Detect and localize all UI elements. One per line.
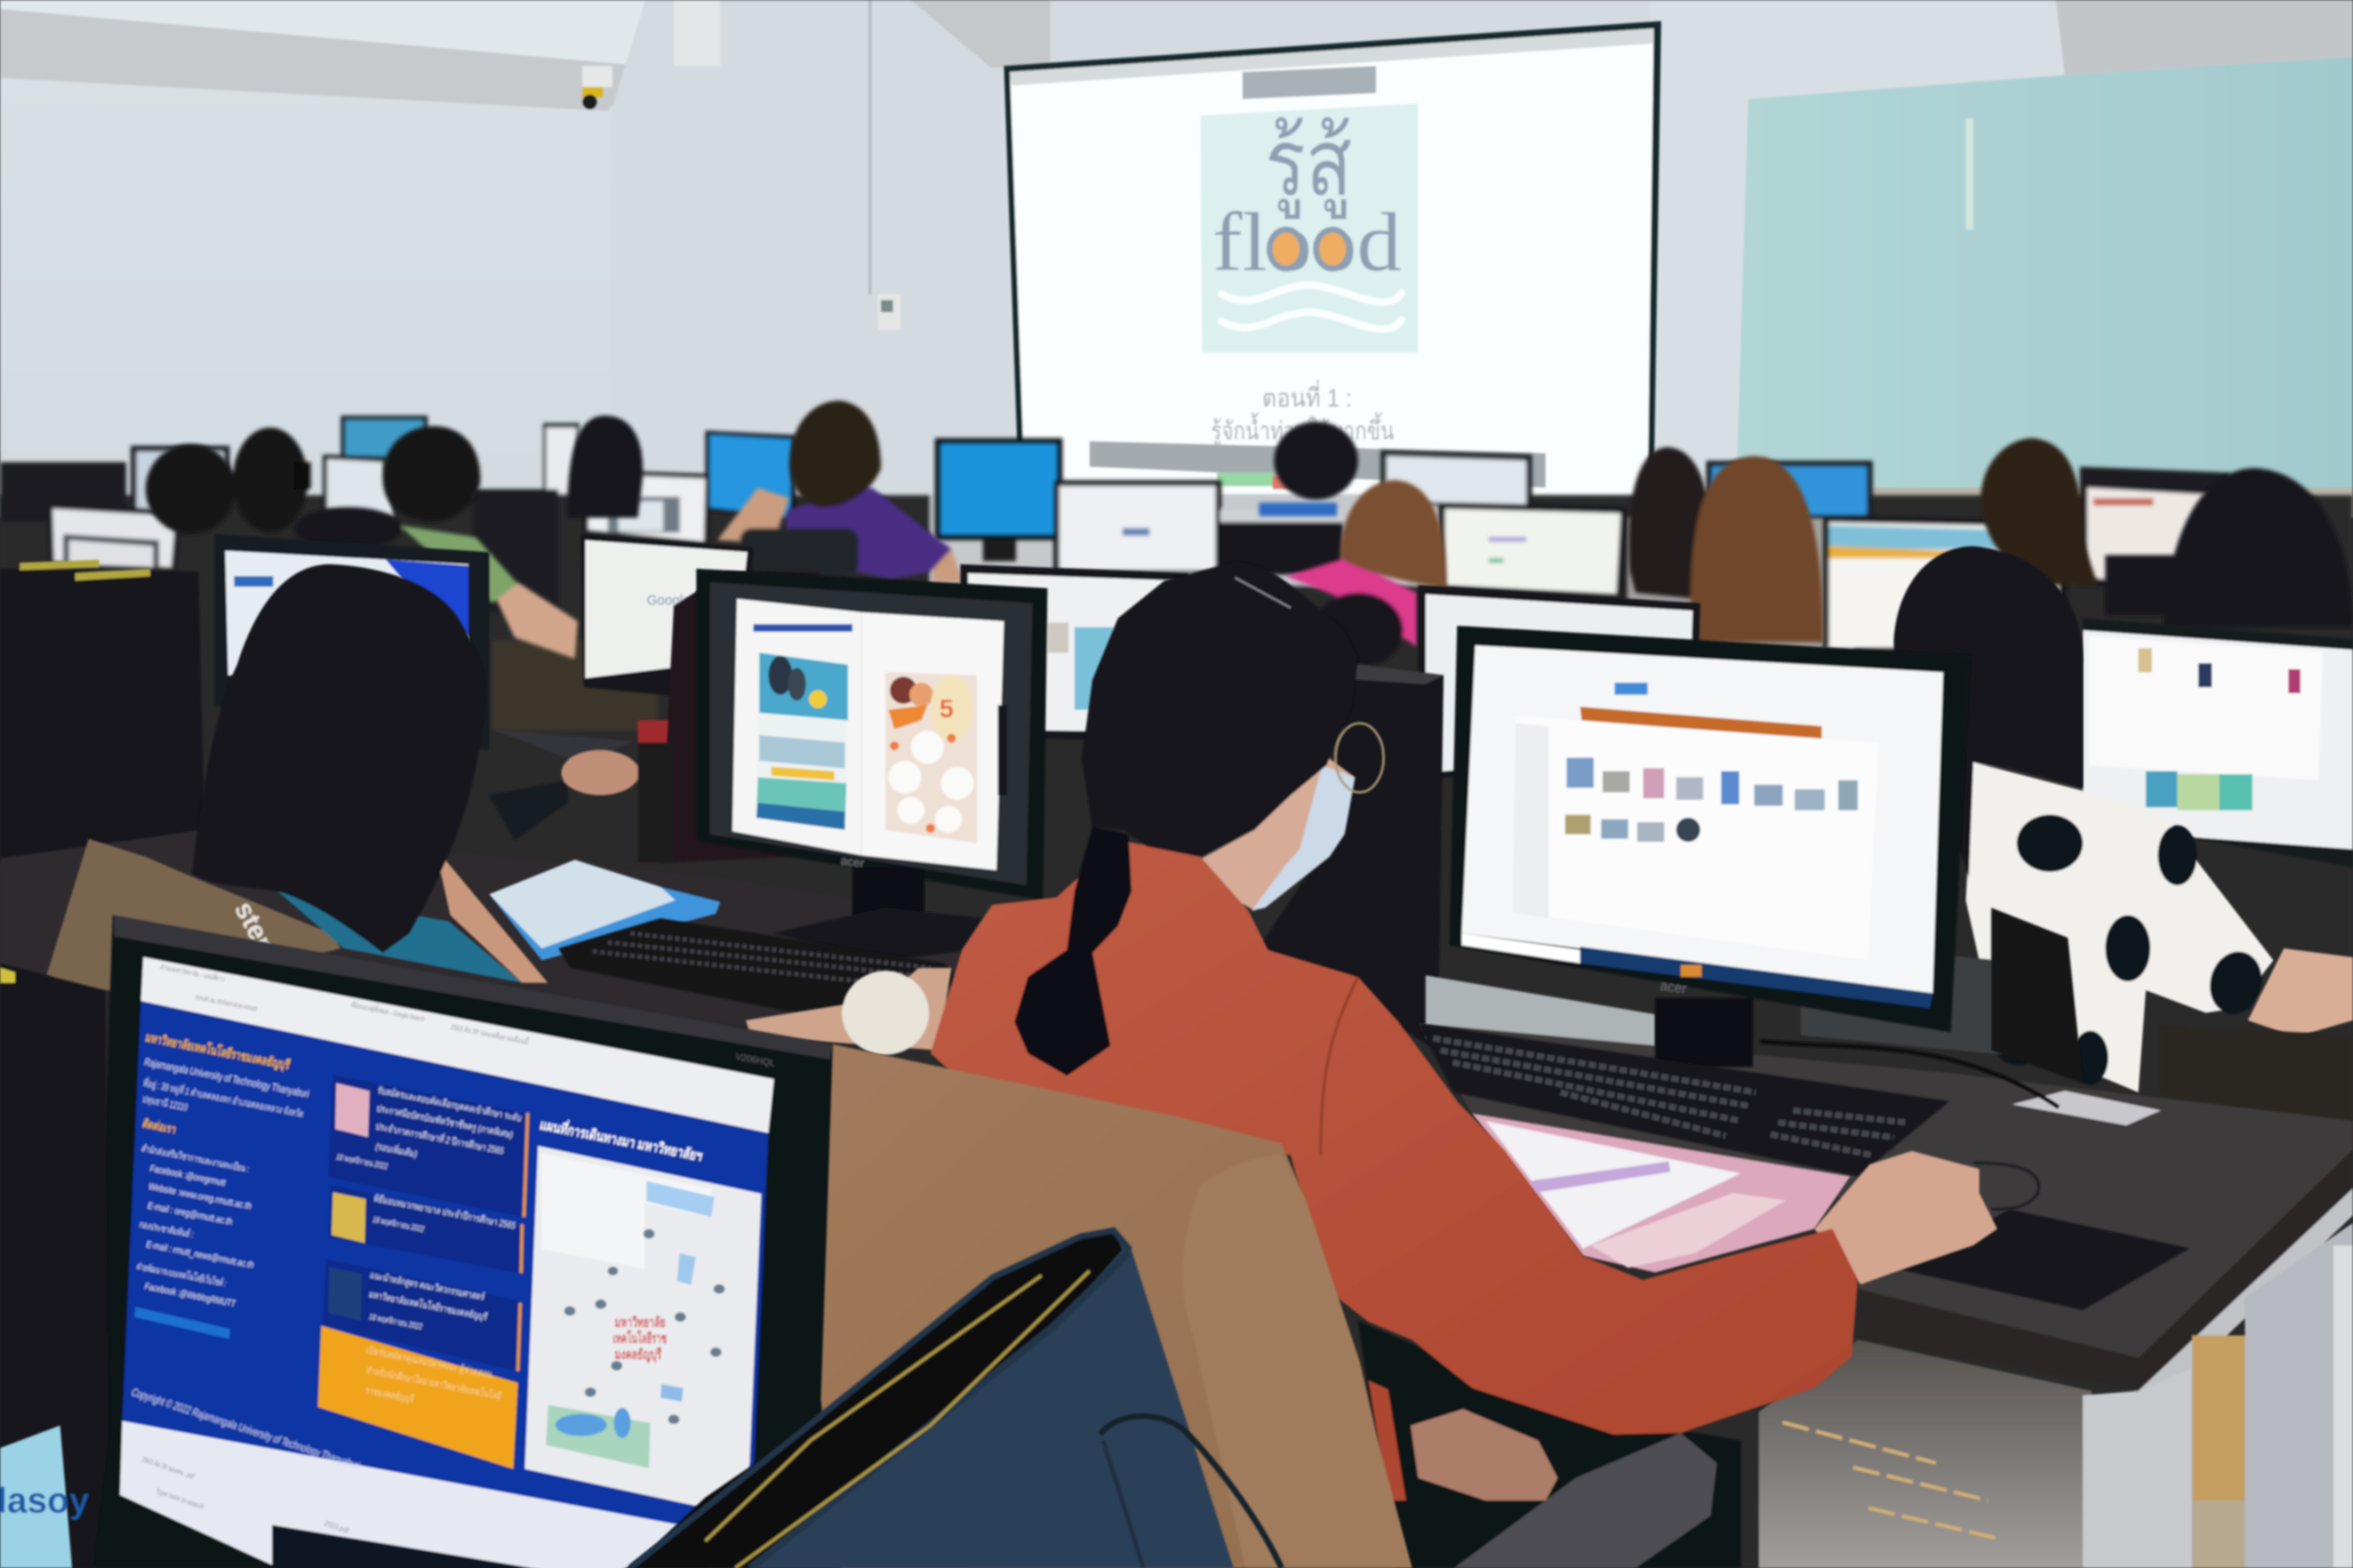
book monitor [696, 568, 1048, 960]
keyboard keys [1433, 1038, 1906, 1156]
head in front of pink shirt [1313, 593, 1403, 667]
logo lettering: รู้สู้ [1265, 111, 1353, 219]
monitor narrow [543, 424, 579, 498]
monitor white middle left [584, 470, 710, 545]
browser tab labels: ที่นั่งบนรถตู้ทั้งหมด – Google Search [350, 1000, 426, 1024]
left keyboard [558, 919, 960, 1013]
centre wall [611, 0, 1035, 495]
orange notice box [318, 1326, 518, 1469]
tower in row two [472, 489, 558, 612]
browser tab labels [140, 962, 530, 1535]
main woman in orange blouse [745, 561, 1858, 1568]
polka dots [1992, 815, 2268, 1085]
map red label: มหาวิทยาลัย [615, 1315, 665, 1331]
news text: ประจำภาคการศึกษาที่ 2 ปีการศึกษา 2565 [375, 1120, 505, 1157]
tower with blue lights [1220, 510, 1343, 575]
hair [1894, 546, 2083, 878]
right upper wall [2056, 0, 2353, 75]
under-desk cabinet [1759, 1340, 2091, 1568]
monitor left blue page [215, 535, 489, 750]
utility box [674, 0, 720, 66]
monitor right edge [2083, 618, 2353, 867]
bag zipper [705, 1271, 1090, 1568]
orange sliver [1369, 1381, 1406, 1500]
news text: มหาวิทยาลัยเทคโนโลยีราชมงคลธัญบุรี [368, 1288, 488, 1322]
scrunchie [841, 970, 929, 1055]
bag opening [631, 1230, 1123, 1568]
news text: 18 พฤศจิกายน 2022 [372, 1215, 425, 1234]
contact details [136, 1143, 255, 1309]
light desk reflection [1426, 975, 1656, 1053]
browser tab labels: Type here to search [154, 1486, 206, 1512]
news text: 18 พฤศจิกายน 2022 [335, 1152, 389, 1171]
monitor white centre [1053, 480, 1222, 573]
arm [2248, 949, 2353, 1037]
projector screen [1004, 21, 1661, 495]
zoom toolbar [1090, 441, 1545, 488]
blouse armhole seam [1321, 977, 1358, 1156]
monitor beside projector [1381, 450, 1532, 507]
browser tab labels: 2023.pdf [323, 1518, 351, 1535]
projected caption: ตอนที่ 1 : [1262, 380, 1353, 412]
file explorer window [1513, 715, 1879, 960]
person dark brown hair right [1981, 439, 2098, 585]
map red label [613, 1315, 666, 1364]
ponytail [1015, 826, 1131, 1076]
plastic folder on desk [489, 860, 720, 960]
person purple shirt [717, 401, 964, 583]
news thumbnails [328, 1083, 370, 1321]
dark lap area [1358, 1320, 1740, 1568]
milk carton [0, 1426, 89, 1568]
jacket logo: ster [229, 897, 279, 954]
campus map [525, 1145, 761, 1517]
monitor stand right [1656, 998, 1753, 1067]
contact details: Facebook :@WeblogRMUTT [144, 1282, 237, 1309]
news text: 18 พฤศจิกายน 2022 [368, 1312, 424, 1331]
screen top label [1242, 66, 1376, 99]
book left page [732, 599, 861, 856]
page blue background [122, 1001, 768, 1565]
back row people [146, 401, 2353, 667]
right keyboard [1418, 1023, 1949, 1176]
monitor far right [2080, 467, 2230, 593]
whiteboard [1737, 57, 2353, 489]
forearm [745, 968, 952, 1050]
news text: (รอบเพิ่มเติม) [375, 1140, 419, 1160]
back of room zone [0, 495, 2353, 1568]
person black hair far right [2164, 468, 2353, 627]
blue shirt [278, 891, 522, 983]
paper and pink folder [1472, 1113, 1850, 1272]
logo waves [1222, 285, 1401, 329]
browser tab labels: 2563 ล้อ 39 ของคน...pdf [140, 1454, 197, 1480]
monitor google: Google [647, 593, 690, 608]
grey chair arm [1454, 1433, 1717, 1568]
back desk left with second-row items [0, 571, 960, 1035]
whiteboard tray [1737, 488, 2353, 515]
monitor centre second row [960, 564, 1189, 743]
lower hand [1411, 1409, 1558, 1500]
copyright line: Copyright © 2022 Rajamangala University of Technology Thanyaburi [130, 1386, 362, 1472]
monitor white left [47, 503, 182, 570]
person green shirt [383, 426, 578, 659]
university details: ที่อยู่ : 39 หมู่ที่ 1 ตำบลคลองหก อำเภอคลองหลวง จังหวัด [142, 1076, 305, 1120]
map red label: มงคลธัญบุรี [615, 1346, 662, 1364]
contact details: สำนักส่งเสริมวิชาการและงานทะเบียน : [140, 1143, 250, 1175]
black tower computer [1260, 664, 1444, 1050]
bag strap [1100, 1416, 1282, 1568]
foreground monitor [90, 915, 833, 1568]
cable grommet [2012, 1091, 2161, 1126]
wood floor behind [2192, 1336, 2247, 1568]
university title: มหาวิทยาลัยเทคโนโลยีราชมงคลธัญบุรี [144, 1030, 292, 1073]
monitor header strip [1580, 707, 1822, 740]
security camera [583, 66, 613, 109]
projected caption: รู้จักน้ำท่วมให้มากขึ้น [1211, 412, 1394, 446]
thermostat [878, 294, 901, 330]
bulkhead shadow [0, 9, 644, 111]
wall cable [869, 0, 872, 294]
person pink shirt [1286, 480, 1447, 647]
monitor blue desktop one [705, 431, 797, 520]
person with face mask [232, 427, 311, 533]
back row monitors and towers [0, 416, 2230, 648]
university details: ปทุมธานี 12110 [141, 1094, 189, 1113]
second row monitors [215, 535, 2353, 867]
card accent bars [518, 1113, 528, 1371]
model label: V206HQL [735, 1052, 776, 1069]
news text: แนะนำหลักสูตร คณะวิศวกรรมศาสตร์ [369, 1270, 486, 1303]
beige chair jacket [821, 1045, 1412, 1568]
brown jacket on chair [47, 839, 341, 990]
glasses [1336, 723, 1384, 792]
mouse pad [1899, 1209, 2189, 1310]
flood logo panel [1201, 104, 1418, 353]
logo lettering [1212, 111, 1401, 289]
map red label: เทคโนโลยีราช [613, 1329, 666, 1347]
tower at right rear [2105, 555, 2179, 616]
contact details: Website :www.oreg.rmutt.ac.th [148, 1181, 253, 1212]
notice text: เปิดรับสมัครคุณสมบัตรคณะ ผู้ช่วยสอน [365, 1345, 494, 1381]
person dark hair left [146, 444, 235, 535]
contact details: กองประชาสัมพันธ์ : [138, 1219, 195, 1240]
contact details: E-mail : rmutt_news@rmutt.ac.th [145, 1240, 255, 1271]
contact details: E-mail : oreg@rmutt.ac.th [147, 1201, 233, 1227]
bag rim [631, 1230, 1130, 1568]
monitor centre right second row [1418, 585, 1700, 780]
left tower computer [0, 560, 204, 864]
monitor google [581, 535, 753, 702]
right main monitor [1449, 626, 1970, 1067]
footer download bar [120, 1421, 680, 1568]
desk leg [2083, 1366, 2192, 1568]
monitor blue right [1706, 460, 1873, 518]
university details: Rajamangala University of Technology Thanyaburi [143, 1056, 311, 1100]
left wall [0, 0, 646, 450]
monitor brand: acer [840, 853, 866, 871]
contact heading: ติดต่อเรา [141, 1117, 178, 1136]
website screen in monitor [120, 957, 774, 1568]
news card three [323, 1259, 520, 1371]
contact details: Facebook :@oregrmutt [149, 1163, 227, 1189]
desk top [1418, 1023, 2353, 1358]
right polka dot woman [1894, 546, 2353, 1093]
news card one [328, 1075, 525, 1217]
monitor stand [853, 867, 924, 934]
browser tab labels: rmutt.ac.th/service-rmutt [195, 992, 259, 1013]
notice text: ราชมงคลธัญบุรี [364, 1384, 415, 1405]
monitor blue desktop two [935, 439, 1063, 561]
monitor brand: acer [1659, 979, 1688, 998]
neck and face [1196, 753, 1355, 911]
browser tab labels: 2563 ล้อ 39 รอบเหลือตามเดือนนี้ [450, 1021, 530, 1047]
taskbar [1580, 947, 1933, 1008]
right desk surface [1418, 908, 2353, 1568]
visitor counter [135, 1307, 230, 1339]
face mask [1252, 765, 1355, 911]
person behind monitor [568, 416, 643, 518]
hair clip [1235, 578, 1290, 608]
monitor white orange [1823, 516, 2068, 648]
person dark hair centre right [1629, 447, 1708, 599]
cabinet vents [1783, 1422, 1995, 1538]
desk front edge [1858, 1149, 2353, 1391]
notice text [364, 1345, 503, 1405]
monitor far left [131, 445, 230, 512]
contact details: ฝ่ายพัฒนาระบบเทคโนโลยีเว็บไซต์ : [136, 1259, 228, 1289]
logo faces [1270, 230, 1349, 268]
bare arm [435, 848, 548, 983]
monitor small left [341, 416, 427, 460]
room background: walls and whiteboard [0, 0, 2353, 518]
hair [1082, 561, 1358, 856]
pen [1530, 1161, 1671, 1192]
orange blouse [931, 841, 1858, 1434]
monitor white centre right [1439, 503, 1626, 596]
book right page [861, 612, 1004, 871]
whiteboard streak [1966, 119, 1974, 230]
dark dock on book viewer [998, 705, 1007, 795]
polka dot blouse [1966, 762, 2273, 1093]
infographic number: 5 [939, 694, 953, 723]
right panel [2245, 1223, 2353, 1568]
university details [141, 1056, 311, 1120]
right wall [1643, 0, 2065, 518]
black chair back [1992, 908, 2083, 1083]
back desk at far right [2159, 1025, 2353, 1126]
news card two [328, 1185, 521, 1273]
hand on mouse [1815, 1151, 2039, 1285]
map heading: แผนที่การเดินทางมา มหาวิทยาลัยฯ [538, 1113, 705, 1164]
ceiling bulkhead [0, 0, 646, 66]
projected caption [1211, 380, 1394, 446]
tower far left [0, 462, 126, 522]
news text: รับสมัครและสอบคัดเลือกบุคคลเข้าศึกษา ระดับ [376, 1084, 523, 1124]
desk rail [2138, 1189, 2353, 1391]
office chair back [740, 528, 858, 576]
long black hair [192, 564, 486, 952]
person light brown hair [1690, 456, 1823, 642]
black handbag [631, 1230, 1282, 1568]
mesh chair [1801, 941, 2022, 1056]
jacket sleeve fold [1182, 1156, 1412, 1568]
thumbnails [1565, 758, 1858, 841]
notice text: สำหรับนักศึกษาใหม่ มหาวิทยาลัยเทคโนโลยี [365, 1364, 503, 1402]
news text: พิธีมอบหมวกพยาบาล ประจำปีการศึกษา 2565 [373, 1192, 517, 1231]
browser tab labels: สำรองมหาวิทยาลัย – แผนที่ดาว [159, 962, 226, 984]
person blue shirt [1259, 422, 1358, 516]
left woman seen from behind [47, 564, 548, 990]
foreground left tower computer [0, 964, 108, 1568]
logo lettering: flood [1212, 196, 1401, 289]
person small head [295, 507, 402, 549]
news text: ประกาศนียบัตรบัณฑิตวิชาชีพครู (ภาคพิเศษ) [376, 1103, 514, 1141]
monitor small white [323, 455, 394, 518]
news text [335, 1084, 523, 1331]
thumbnails on right monitor [2138, 648, 2300, 810]
browser chrome [141, 957, 774, 1133]
